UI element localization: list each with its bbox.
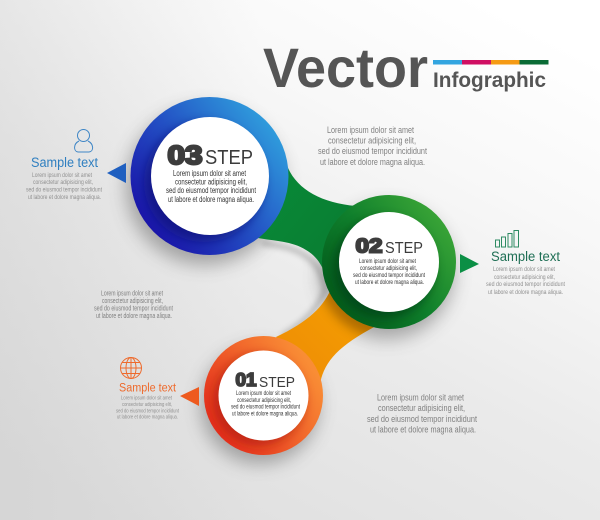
title xyxy=(263,36,548,99)
text block: top right xyxy=(318,125,427,167)
text block: mid left: sed do eiusmod tempor incididunt xyxy=(94,306,173,312)
step 01 text: Lorem ipsum dolor sit amet xyxy=(236,390,291,397)
text block: orange sample: sed do eiusmod tempor incididunt xyxy=(116,408,179,414)
text block: bottom right: Lorem ipsum dolor sit amet xyxy=(377,392,464,402)
icon: bar chart xyxy=(496,230,518,247)
text block: bottom right: consectetur adipisicing elit, xyxy=(378,403,465,413)
text block: top right: consectetur adipisicing elit, xyxy=(328,136,416,146)
step 03 text: sed do eiusmod tempor incididunt xyxy=(166,186,257,195)
connector: green xyxy=(258,168,356,292)
step 01 text: consectetur adipisicing elit, xyxy=(237,397,291,404)
step 01 text: ut labore et dolore magna aliqua. xyxy=(232,410,298,418)
step 02 number: 02 xyxy=(356,234,382,258)
text block: top right: ut labore et dolore magna aliqua. xyxy=(320,157,425,167)
shadow on orange connector xyxy=(322,292,374,337)
text block: blue sample xyxy=(26,172,102,201)
connector shadows xyxy=(262,243,325,336)
step 02 label: STEP xyxy=(385,240,423,257)
step 02 text: sed do eiusmod tempor incididunt xyxy=(353,272,425,279)
arrow: green xyxy=(460,254,479,273)
drop shadows xyxy=(126,107,454,464)
step 03 text: Lorem ipsum dolor sit amet xyxy=(173,169,247,178)
icon: person xyxy=(75,130,93,152)
text block: orange sample xyxy=(116,396,179,420)
text block: mid left: consectetur adipisicing elit, xyxy=(102,298,163,305)
label: sample text blue: Sample text xyxy=(31,155,98,170)
arrow: blue xyxy=(107,163,126,183)
text block: green sample: Lorem ipsum dolor sit amet xyxy=(493,266,555,273)
text block: blue sample: Lorem ipsum dolor sit amet xyxy=(32,172,92,179)
step 03 text xyxy=(166,169,257,204)
text block: top right: Lorem ipsum dolor sit amet xyxy=(327,125,414,135)
text block: blue sample: ut labore et dolore magna aliqua. xyxy=(28,194,101,201)
panel: step 01 xyxy=(204,336,323,455)
title colour bar xyxy=(433,60,548,64)
text block: blue sample: consectetur adipisicing elit, xyxy=(33,179,93,186)
arrow: orange xyxy=(180,387,199,406)
panel: step 02 xyxy=(322,195,456,329)
text block: mid left xyxy=(94,290,173,320)
step 01 text xyxy=(231,390,300,418)
text block: top right: sed do eiusmod tempor incididunt xyxy=(318,146,427,156)
text block: bottom right: sed do eiusmod tempor incididunt xyxy=(367,414,477,424)
text block: orange sample: ut labore et dolore magna aliqua. xyxy=(117,414,178,420)
text block: bottom right: ut labore et dolore magna aliqua. xyxy=(370,424,476,434)
title: Vector xyxy=(263,36,428,99)
connector: orange xyxy=(276,286,376,384)
step 03 label: STEP xyxy=(205,147,253,169)
step 01 text: sed do eiusmod tempor incididunt xyxy=(231,404,300,410)
text block: green sample: sed do eiusmod tempor incididunt xyxy=(486,281,565,288)
panel: step 03 xyxy=(130,97,288,255)
step 02 text: consectetur adipisicing elit, xyxy=(360,265,417,272)
step 02 text: ut labore et dolore magna aliqua. xyxy=(355,279,424,286)
text block: bottom right xyxy=(367,392,477,434)
text block: green sample: ut labore et dolore magna aliqua. xyxy=(488,289,563,296)
step 03 text: ut labore et dolore magna aliqua. xyxy=(168,195,254,204)
text block: mid left: Lorem ipsum dolor sit amet xyxy=(101,290,163,298)
label: sample text green: Sample text xyxy=(491,249,560,264)
text block: orange sample: Lorem ipsum dolor sit amet xyxy=(121,396,172,402)
step 02 text: Lorem ipsum dolor sit amet xyxy=(359,258,416,265)
step 03 text: consectetur adipisicing elit, xyxy=(175,178,247,186)
label: sample text orange: Sample text xyxy=(119,382,177,394)
text block: green sample xyxy=(486,266,565,296)
step 03 number: 03 xyxy=(168,140,202,170)
step 01 label: STEP xyxy=(259,375,295,391)
text block: blue sample: sed do eiusmod tempor incididunt xyxy=(26,186,102,194)
step 01 number: 01 xyxy=(236,370,256,390)
text block: green sample: consectetur adipisicing elit, xyxy=(494,274,555,281)
subtitle: Infographic xyxy=(433,69,546,92)
icon: globe xyxy=(120,358,142,378)
step 02 text xyxy=(353,258,425,286)
text block: orange sample: consectetur adipisicing elit, xyxy=(122,402,172,408)
text block: mid left: ut labore et dolore magna aliqua. xyxy=(96,313,172,320)
